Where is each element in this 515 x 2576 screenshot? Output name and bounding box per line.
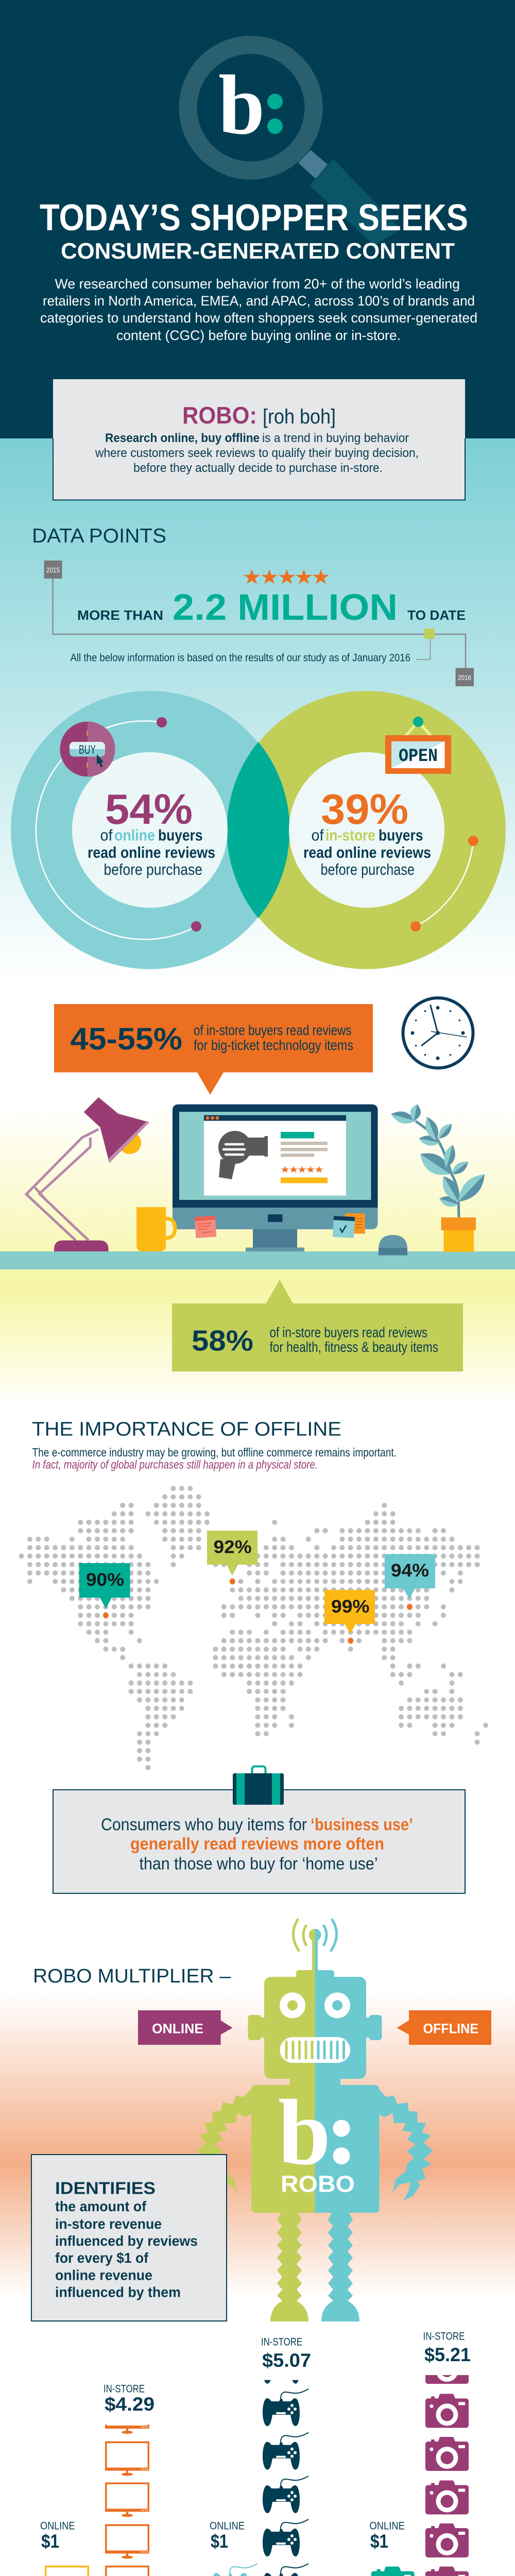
subheading text: In fact, majority of global purchases still happen in a physical store. xyxy=(32,1458,318,1471)
panel: identifies: influenced by reviews xyxy=(55,2233,198,2249)
background: yellow fade in xyxy=(0,1108,515,1288)
robot chest logo: b xyxy=(278,2081,331,2184)
chart: flat-panel TV pictogram xyxy=(40,2383,154,2576)
title: CONSUMER-GENERATED CONTENT xyxy=(61,239,455,264)
illustration: robot xyxy=(197,1920,433,2321)
tag: online xyxy=(138,2010,233,2045)
icon: hair dryer xyxy=(218,1131,268,1179)
map marker: 99%: 99% xyxy=(331,1597,370,1617)
tag: online: ONLINE xyxy=(152,2021,203,2037)
callout: big-ticket technology: for big-ticket technology items xyxy=(194,1037,353,1053)
note: study date: All the below information is based on the results of our study as of January 2016 xyxy=(70,652,410,664)
stat: in-store buyers 39%: read online reviews xyxy=(303,843,431,861)
map marker: 92%: 92% xyxy=(214,1537,252,1557)
chart: xbox pictogram: IN-STORE xyxy=(261,2336,302,2348)
icon: five stars xyxy=(244,569,329,584)
icon: computer mouse xyxy=(379,1235,407,1255)
map marker: 99% xyxy=(324,1590,375,1634)
panel: ROBO definition: Research online, buy offline xyxy=(105,431,260,445)
subheading text: The e-commerce industry may be growing, but offline commerce remains important. xyxy=(32,1446,397,1459)
chart: dslr pictogram: ONLINE xyxy=(370,2520,405,2532)
timeline connector xyxy=(44,561,474,686)
map marker: 92% xyxy=(207,1531,258,1575)
callout: health fitness beauty: for health, fitness & beauty items xyxy=(270,1339,438,1355)
panel: business use: generally read reviews more often xyxy=(130,1834,384,1853)
callout: big-ticket technology: of in-store buyers read reviews xyxy=(194,1022,351,1038)
robot eyes xyxy=(280,1992,350,2018)
callout: big-ticket technology xyxy=(54,1004,373,1095)
robot mouth xyxy=(280,2037,350,2063)
intro text: retailers in North America, EMEA, and APAC, across 100’s of brands and xyxy=(43,293,475,309)
panel: identifies: for every $1 of xyxy=(55,2250,149,2266)
map marker: 90% xyxy=(79,1563,130,1608)
robot legs xyxy=(270,2210,359,2321)
background: yellow fade out xyxy=(0,1288,515,1406)
intro text: We researched consumer behavior from 20+ of the world’s leading xyxy=(55,276,460,292)
subheading text xyxy=(32,1446,397,1471)
chart: xbox pictogram xyxy=(210,2336,311,2576)
orbit: in-store xyxy=(410,836,478,931)
stat: in-store buyers 39%: of xyxy=(311,826,324,844)
chart: xbox pictogram: $5.07 xyxy=(262,2350,311,2371)
background: peach fade out xyxy=(0,2164,515,2298)
chart: xbox pictogram: ONLINE xyxy=(210,2520,245,2532)
icon: open sign: OPEN xyxy=(399,746,438,767)
background: teal fade xyxy=(0,438,515,979)
background: peach fade in xyxy=(0,1994,515,2164)
intro text: categories to understand how often shoppers seek consumer-generated xyxy=(40,310,477,326)
icon: desk lamp xyxy=(26,1097,149,1251)
chart: venn online vs in-store xyxy=(11,691,506,969)
callout: health fitness beauty xyxy=(172,1280,463,1371)
stat: online buyers 54%: of xyxy=(100,826,113,844)
stat: online buyers 54%: before purchase xyxy=(104,860,202,878)
stat: in-store buyers 39%: buyers xyxy=(379,826,423,844)
stat: 2.2 million reviews xyxy=(77,587,466,628)
heading: importance of offline: THE IMPORTANCE OF OFFLINE xyxy=(32,1419,341,1440)
icon: magnifying glass with logo xyxy=(188,45,401,245)
panel: ROBO definition: ROBO: xyxy=(182,402,257,429)
heading: data points: DATA POINTS xyxy=(32,525,166,547)
chart: dslr pictogram: $1 xyxy=(370,2531,388,2552)
panel: business use: than those who buy for ‘home use’ xyxy=(139,1854,378,1873)
callout: health fitness beauty: of in-store buyers read reviews xyxy=(270,1324,427,1341)
chart: flat-panel TV pictogram: $1 xyxy=(41,2531,59,2552)
title xyxy=(40,197,468,264)
chart: dslr pictogram xyxy=(370,2331,471,2576)
tag: offline xyxy=(397,2010,491,2045)
icon: magnifying glass with logo: b xyxy=(218,58,265,152)
heading: robo multiplier: ROBO MULTIPLIER – xyxy=(33,1965,231,1987)
chart: dslr pictogram: $5.21 xyxy=(424,2344,471,2365)
stat: in-store buyers 39%: before purchase xyxy=(320,860,415,878)
stat: online buyers 54%: online xyxy=(114,826,155,844)
map marker: 94%: 94% xyxy=(391,1561,429,1581)
stat: 2.2 million reviews: TO DATE xyxy=(407,607,466,623)
panel: business use xyxy=(53,1790,465,1893)
icon: buy button xyxy=(60,721,115,777)
stat: online buyers 54%: read online reviews xyxy=(88,843,215,861)
icon: wall clock xyxy=(403,998,473,1068)
map marker: 90%: 90% xyxy=(86,1570,124,1590)
intro text xyxy=(40,276,477,343)
callout: health fitness beauty: 58% xyxy=(192,1324,253,1357)
chart: flat-panel TV pictogram: ONLINE xyxy=(40,2520,75,2532)
chart: flat-panel TV pictogram: $4.29 xyxy=(105,2394,154,2415)
stat: online buyers 54%: 54% xyxy=(105,785,193,833)
icon: potted plant xyxy=(391,1104,485,1252)
icon: desktop monitor with product page xyxy=(173,1105,378,1251)
tag: offline: OFFLINE xyxy=(423,2021,478,2037)
stat: online buyers 54%: buyers xyxy=(158,826,203,844)
panel: business use: ‘business use’ xyxy=(311,1815,413,1834)
panel: identifies: the amount of xyxy=(55,2198,147,2214)
stat: in-store buyers 39% xyxy=(303,785,431,878)
chart: dotted world map xyxy=(22,1488,486,1768)
timeline connector: 2016 xyxy=(458,673,471,682)
desk surface xyxy=(0,1251,515,1269)
robot chest logo xyxy=(278,2081,355,2197)
callout: big-ticket technology: 45-55% xyxy=(70,1022,182,1056)
panel: business use: Consumers who buy items for xyxy=(101,1815,307,1834)
map marker: 94% xyxy=(385,1554,435,1599)
chart: dslr pictogram: IN-STORE xyxy=(423,2331,465,2343)
panel: ROBO definition: is a trend in buying behavior xyxy=(262,431,409,445)
panel: ROBO definition: [roh boh] xyxy=(263,405,336,428)
stat: in-store buyers 39%: 39% xyxy=(321,785,408,833)
panel: identifies xyxy=(31,2155,227,2321)
intro text: content (CGC) before buying online or in-store. xyxy=(116,328,401,343)
stat: 2.2 million reviews: MORE THAN xyxy=(77,607,163,623)
stat: in-store buyers 39%: in-store xyxy=(325,826,375,844)
icon: briefcase xyxy=(233,1766,284,1805)
robot chest logo: ROBO xyxy=(281,2171,355,2197)
panel: ROBO definition xyxy=(53,379,465,500)
panel: identifies: IDENTIFIES xyxy=(55,2178,156,2198)
antenna signal arcs xyxy=(293,1920,337,1951)
panel: identifies: in-store revenue xyxy=(55,2216,162,2232)
panel: ROBO definition: before they actually decide to purchase in-store. xyxy=(133,461,383,475)
panel: ROBO definition: where customers seek reviews to qualify their buying decision, xyxy=(95,446,419,460)
panel: identifies: online revenue xyxy=(55,2267,152,2283)
orbit: online xyxy=(36,717,201,939)
stat: 2.2 million reviews: 2.2 MILLION xyxy=(173,587,398,628)
background: header navy xyxy=(0,0,515,439)
chart: xbox pictogram: $1 xyxy=(211,2531,228,2552)
icon: sticky notes xyxy=(195,1213,365,1238)
chart: flat-panel TV pictogram: IN-STORE xyxy=(104,2383,145,2395)
icon: coffee mug xyxy=(136,1207,175,1251)
panel: identifies: influenced by them xyxy=(55,2284,181,2300)
icon: open sign xyxy=(385,717,451,774)
icon: buy button: BUY xyxy=(79,743,96,757)
stat: online buyers 54% xyxy=(88,785,215,878)
title: TODAY’S SHOPPER SEEKS xyxy=(40,197,468,239)
timeline connector: 2015 xyxy=(46,566,60,574)
